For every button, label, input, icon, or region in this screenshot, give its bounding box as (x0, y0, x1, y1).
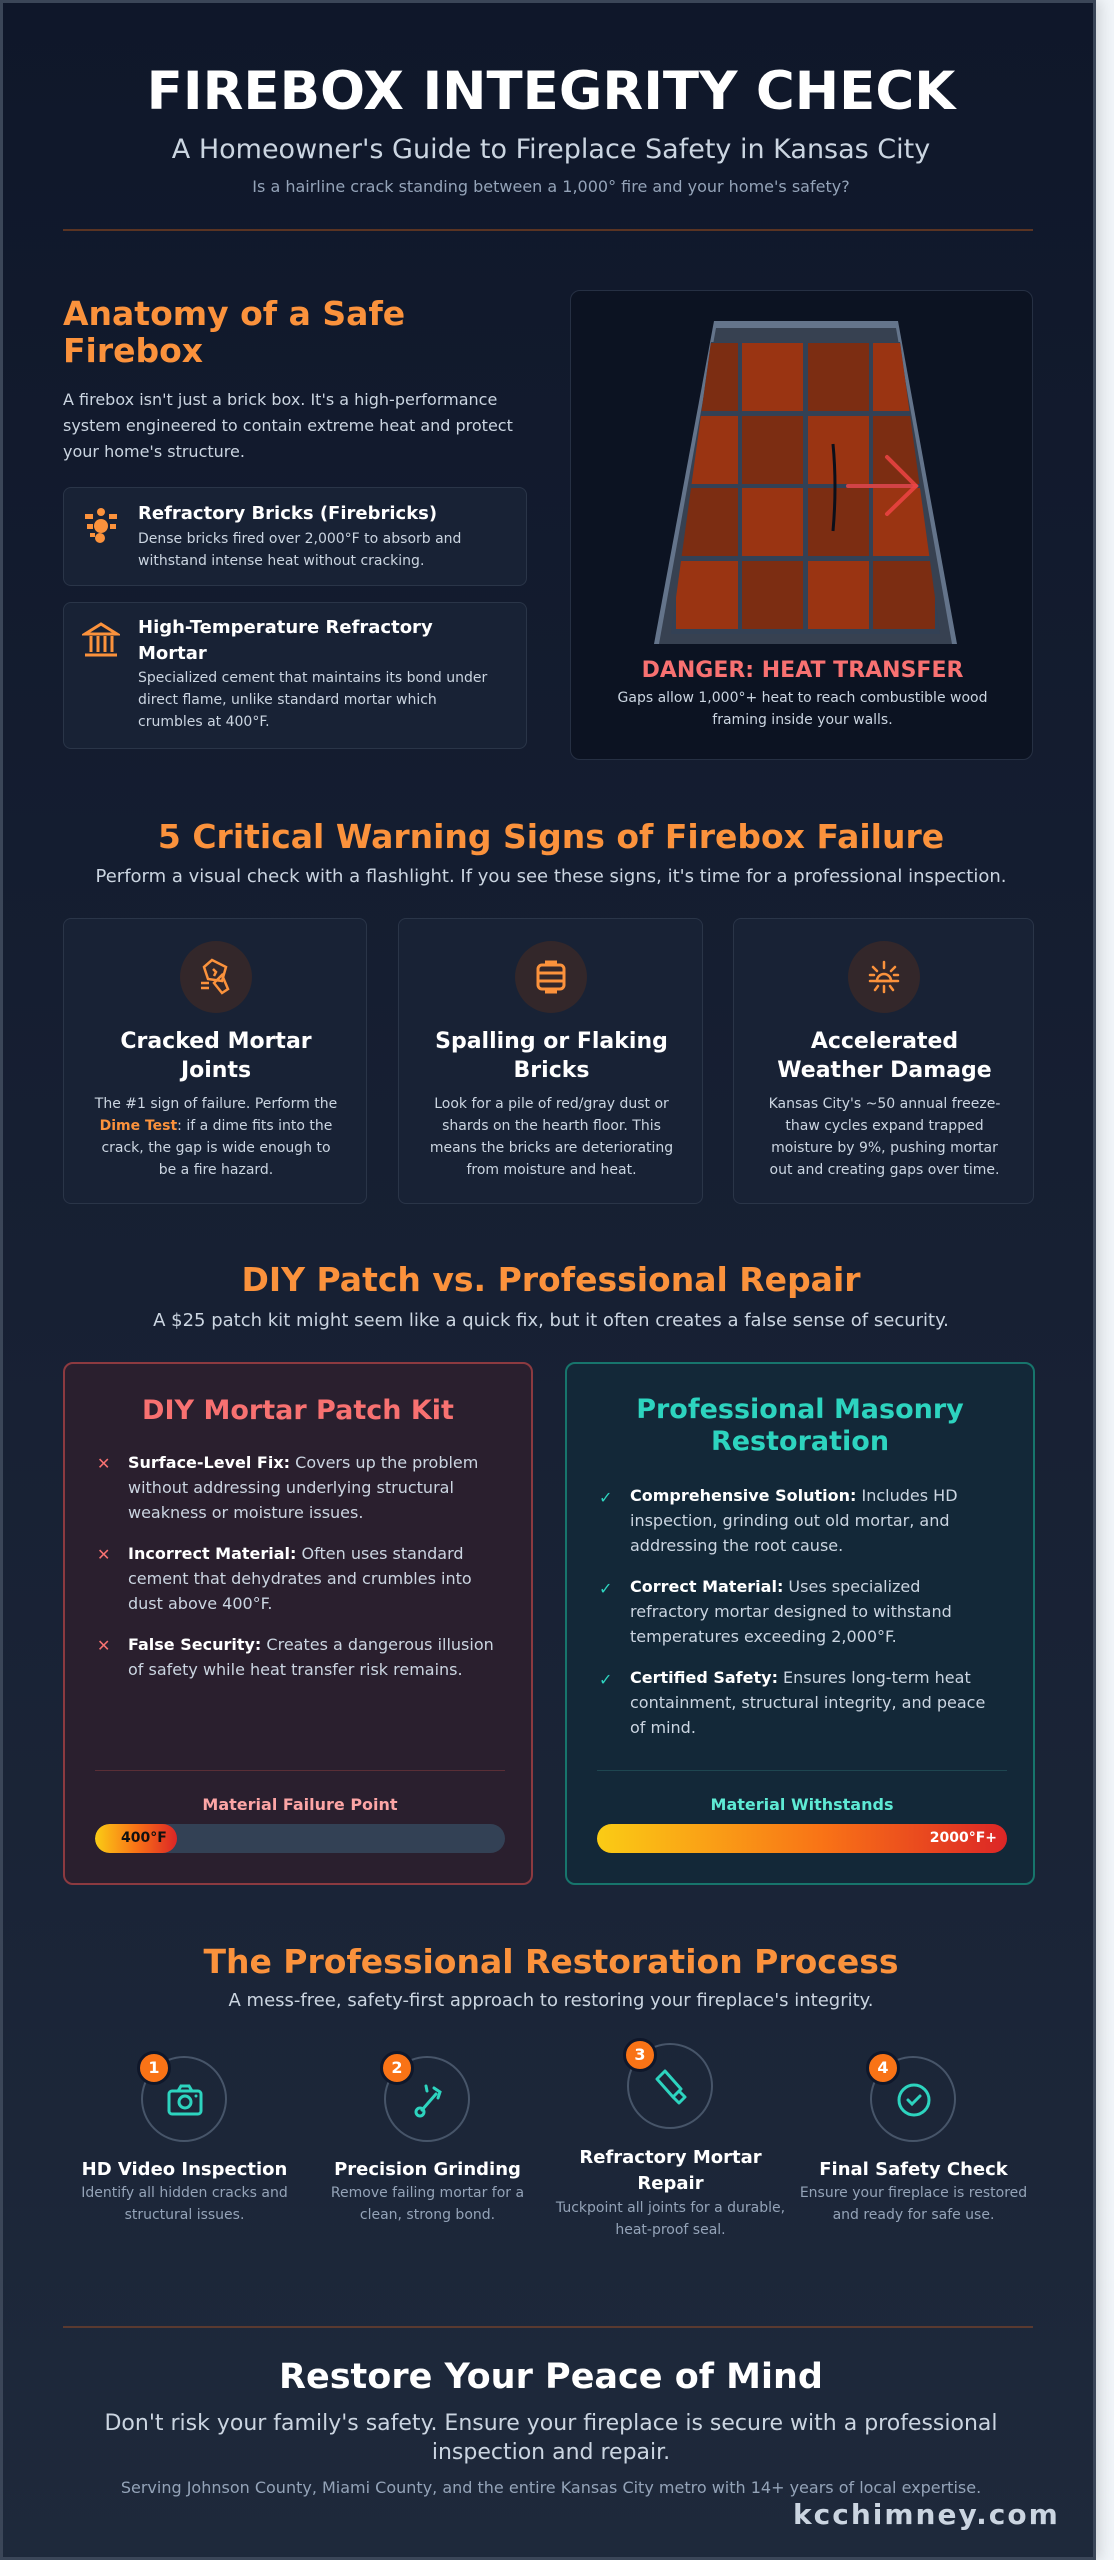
text: warning subtitle: Perform a visual check with a flashlight. If you see these signs, it's time for a professional inspection. (96, 866, 1006, 887)
text: mortar title: High-Temperature Refractory (138, 617, 433, 638)
chart: withstands bar: Material Withstands (711, 1795, 893, 1814)
text: step 1: HD Video Inspection (82, 2159, 287, 2180)
chart: firebox illustration (654, 321, 957, 644)
text: step 2 (331, 2159, 524, 2223)
list: diy cons: ✕ (97, 1545, 110, 1564)
text: mortar title: Mortar (138, 643, 207, 664)
text: mortar desc: direct flame, unlike standard mortar which (138, 692, 437, 708)
text: spalling title: Spalling or Flaking (435, 1029, 668, 1054)
list: diy cons: ✕ (97, 1454, 110, 1473)
text: mortar desc: Specialized cement that maintains its bond under (138, 670, 487, 686)
badge: 3 (623, 2038, 657, 2072)
heading: anatomy: Firebox (63, 331, 203, 370)
text: service area: Serving Johnson County, Miami County, and the entire Kansas City metro with 14+ years of local expertise. (121, 2478, 981, 2497)
list: pro benefits: containment, structural integrity, and peace (630, 1693, 985, 1712)
heading: anatomy: Anatomy of a Safe (63, 294, 405, 333)
text: step 3: Tuckpoint all joints for a durable, heat-proof seal. (556, 2200, 785, 2238)
badge: 4: 4 (877, 2058, 889, 2077)
list: pro benefits: Comprehensive Solution: Includes HD (630, 1486, 958, 1505)
text: weather desc: thaw cycles expand trapped (785, 1118, 984, 1134)
chart: withstands bar: 2000°F+ (930, 1830, 997, 1846)
icon: grinder (384, 2056, 470, 2142)
title: FIREBOX INTEGRITY CHECK (147, 61, 955, 122)
text: spalling desc: shards on the hearth floor. This (442, 1118, 661, 1134)
text: bricks desc: Dense bricks fired over 2,000°F to absorb and (138, 531, 461, 547)
card: weather damage (733, 918, 1034, 1204)
badge: 2: 2 (391, 2058, 403, 2077)
list: pro benefits (599, 1486, 985, 1737)
step 2 (331, 2051, 524, 2223)
card: refractory mortar (63, 602, 527, 749)
list: pro benefits: ✓ (599, 1488, 612, 1507)
text: anatomy intro: A firebox isn't just a brick box. It's a high-performance system engineered to contain extreme heat and protect your home's structure. (63, 390, 513, 461)
text: cracked desc: The #1 sign of failure. Perform the (95, 1096, 337, 1112)
panel: professional (565, 1362, 1035, 1885)
list: pro benefits: refractory mortar designed to withstand (630, 1602, 952, 1621)
text: weather title: Weather Damage (777, 1058, 992, 1083)
chart: withstands bar (597, 1795, 1007, 1853)
text: step 3: Refractory Mortar Repair (579, 2147, 762, 2194)
text: cracked desc: Dime Test: if a dime fits into the (100, 1118, 332, 1134)
text: step 4 (800, 2159, 1027, 2223)
text: weather title (777, 1029, 992, 1083)
icon: camera (141, 2056, 227, 2142)
text: spalling desc (430, 1096, 673, 1178)
icon: trowel (627, 2043, 713, 2129)
text: spalling title (435, 1029, 668, 1083)
badge: 1: 1 (148, 2058, 160, 2077)
icon: crack (180, 941, 252, 1013)
list: pro benefits: of mind. (630, 1718, 696, 1737)
text: diy subtitle: A $25 patch kit might seem like a quick fix, but it often creates a false sense of security. (153, 1310, 949, 1331)
step 3 (556, 2038, 785, 2238)
list: diy cons: Surface-Level Fix: Covers up the problem (128, 1453, 478, 1472)
text: cracked title: Cracked Mortar (120, 1029, 312, 1054)
text: step 1: Identify all hidden cracks and structural issues. (81, 2185, 288, 2223)
text: cta body: Don't risk your family's safety. Ensure your fireplace is secure with a professional inspection and repair. (104, 2411, 998, 2465)
list: diy cons: ✕ (97, 1636, 110, 1655)
list: diy cons (97, 1453, 494, 1679)
subtitle: A Homeowner's Guide to Fireplace Safety in Kansas City (172, 134, 930, 165)
text: step 3 (556, 2147, 785, 2238)
list: pro benefits: addressing the root cause. (630, 1536, 843, 1555)
text: weather desc: Kansas City's ~50 annual freeze- (769, 1096, 1000, 1112)
text: cracked title (120, 1029, 312, 1083)
icon: check (870, 2056, 956, 2142)
heading: cta: Restore Your Peace of Mind (279, 2357, 823, 2397)
list: diy cons: False Security: Creates a dangerous illusion (128, 1635, 494, 1654)
list: pro benefits: inspection, grinding out old mortar, and (630, 1511, 950, 1530)
badge: 4 (866, 2051, 900, 2085)
icon: sun (848, 941, 920, 1013)
step 1 (81, 2051, 288, 2223)
text: bricks desc (138, 531, 461, 569)
icon: building (82, 622, 120, 656)
text: weather desc: moisture by 9%, pushing mortar (771, 1140, 998, 1156)
text: step 2: Remove failing mortar for a clean, strong bond. (331, 2185, 524, 2223)
tagline: Is a hairline crack standing between a 1,000° fire and your home's safety? (252, 177, 850, 196)
panel: firebox diagram (570, 290, 1033, 760)
list: pro benefits: temperatures exceeding 2,000°F. (630, 1627, 897, 1646)
text: process subtitle: A mess-free, safety-first approach to restoring your fireplace's integrity. (228, 1990, 874, 2011)
heading: warning signs: 5 Critical Warning Signs of Firebox Failure (158, 817, 944, 856)
chart: failure point bar (95, 1795, 505, 1853)
panel: diy kit (63, 1362, 533, 1885)
text: step 4: Final Safety Check (819, 2159, 1008, 2180)
text: cracked title: Joints (181, 1058, 251, 1083)
list: diy cons: of safety while heat transfer risk remains. (128, 1660, 463, 1679)
heading: pro: Professional Masonry (636, 1394, 964, 1425)
card: cracked mortar (63, 918, 367, 1204)
list: pro benefits: Certified Safety: Ensures long-term heat (630, 1668, 971, 1687)
badge: 3: 3 (634, 2045, 646, 2064)
text: cracked desc: crack, the gap is wide enough to (101, 1140, 331, 1156)
heading: process: The Professional Restoration Process (203, 1942, 899, 1981)
text: spalling desc: Look for a pile of red/gray dust or (434, 1096, 669, 1112)
chart: failure point bar: Material Failure Point (202, 1795, 398, 1814)
heading: pro: Restoration (711, 1426, 889, 1457)
list: pro benefits: Correct Material: Uses specialized (630, 1577, 920, 1596)
text: cracked desc (94, 1096, 337, 1178)
text: step 2: Precision Grinding (334, 2159, 521, 2180)
text: weather title: Accelerated (811, 1029, 958, 1054)
icon: brick (515, 941, 587, 1013)
list: diy cons: without addressing underlying structural (128, 1478, 454, 1497)
heading: diy vs pro: DIY Patch vs. Professional Repair (241, 1260, 861, 1299)
text: bricks title: Refractory Bricks (Firebricks) (138, 503, 437, 524)
list: diy cons: cement that dehydrates and crumbles into (128, 1569, 472, 1588)
text: spalling desc: from moisture and heat. (466, 1162, 637, 1178)
list: pro benefits: ✓ (599, 1579, 612, 1598)
step 4 (800, 2051, 1027, 2223)
text: danger heading: DANGER: HEAT TRANSFER (642, 658, 963, 683)
text: weather desc: out and creating gaps over time. (770, 1162, 999, 1178)
list: pro benefits: ✓ (599, 1670, 612, 1689)
heading: pro (636, 1394, 964, 1457)
text: spalling desc: means the bricks are deteriorating (430, 1140, 673, 1156)
list: diy cons: weakness or moisture issues. (128, 1503, 363, 1522)
card: spalling (398, 918, 703, 1204)
text: weather desc (769, 1096, 1000, 1178)
badge: 1 (137, 2051, 171, 2085)
text: danger desc: Gaps allow 1,000°+ heat to reach combustible wood framing inside your walls. (618, 690, 987, 728)
text: step 4: Ensure your fireplace is restored and ready for safe use. (800, 2185, 1027, 2223)
text: mortar desc (138, 670, 488, 730)
list: diy cons: Incorrect Material: Often uses standard (128, 1544, 464, 1563)
heading: diy: DIY Mortar Patch Kit (142, 1395, 454, 1426)
text: bricks desc: withstand intense heat without cracking. (138, 553, 424, 569)
text: cracked desc: be a fire hazard. (159, 1162, 273, 1178)
text: mortar desc: crumbles at 400°F. (138, 714, 270, 730)
text: mortar title (138, 617, 433, 664)
list: diy cons: dust above 400°F. (128, 1594, 272, 1613)
icon: bricks (85, 508, 117, 543)
chart: failure point bar: 400°F (121, 1830, 167, 1846)
badge: 2 (380, 2051, 414, 2085)
heading: anatomy (63, 294, 405, 370)
section: anatomy (63, 294, 513, 461)
card: refractory bricks (63, 487, 527, 586)
text: spalling title: Bricks (514, 1058, 589, 1083)
text: step 1 (81, 2159, 288, 2223)
text: website: kcchimney.com (793, 2498, 1060, 2531)
